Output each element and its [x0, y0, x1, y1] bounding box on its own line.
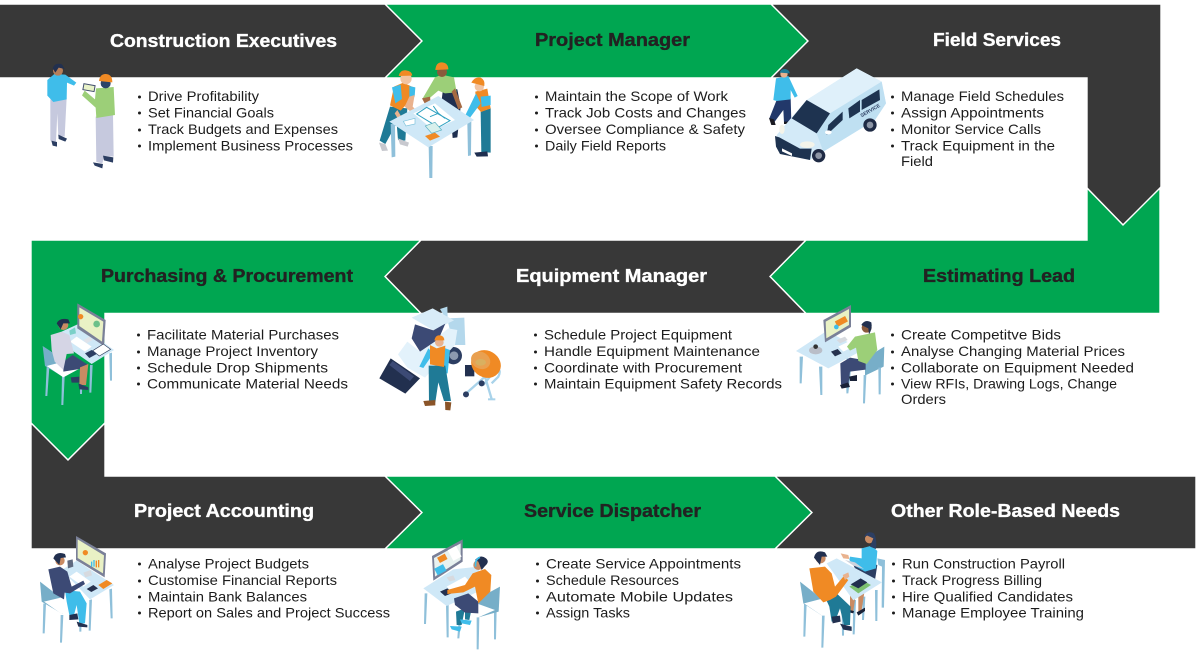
- icon: dispatcher with headset at desk: [423, 539, 500, 649]
- bullet list: Field Services: [891, 88, 1064, 169]
- bullet list: Equipment Manager: [534, 326, 782, 392]
- panel: Service Dispatcher: [385, 476, 812, 649]
- icon: buyer at desk: [43, 303, 114, 405]
- panel: Purchasing & Procurement: [31, 240, 421, 460]
- bullet list: Construction Executives: [138, 88, 353, 154]
- bullet list: Service Dispatcher: Assign Tasks: [546, 604, 630, 620]
- panel: Field Services: [769, 4, 1161, 225]
- icon: two executives with tablet: [47, 64, 115, 168]
- ribbon: Purchasing & Procurement, turning downward: [31, 240, 421, 460]
- bullet list: Other Role-Based Needs: Track Progress Billing: [902, 572, 1042, 588]
- bullet list: Service Dispatcher: [536, 556, 741, 620]
- bullet list: Other Role-Based Needs: Run Construction Payroll: [902, 556, 1065, 572]
- ribbon: Equipment Manager, pointing left: [385, 240, 806, 314]
- bullet list: Construction Executives: Set Financial Goals: [148, 104, 274, 120]
- heading: Purchasing & Procurement: Purchasing & Procurement: [101, 266, 353, 286]
- bullet list: Service Dispatcher: Create Service Appointments: [546, 556, 741, 572]
- bullet list: Project Accounting: Customise Financial Reports: [148, 572, 337, 588]
- bullet list: Field Services: Monitor Service Calls: [901, 121, 1041, 137]
- bullet list: Estimating Lead: Collaborate on Equipment Needed: [901, 360, 1134, 376]
- bullet list: Service Dispatcher: Schedule Resources: [546, 572, 679, 588]
- ribbon: Project Manager: [385, 4, 808, 78]
- bullet list: Estimating Lead: View RFIs, Drawing Logs, Change: [901, 376, 1117, 392]
- bullet list: Other Role-Based Needs: Hire Qualified Candidates: [902, 588, 1073, 604]
- ribbon: Field Services, turning downward: [771, 4, 1161, 225]
- bullet list: Construction Executives: Implement Business Processes: [148, 138, 353, 154]
- bullet list: Construction Executives: Track Budgets and Expenses: [148, 121, 338, 137]
- heading: Project Manager: Project Manager: [535, 30, 690, 50]
- bullet list: Project Manager: Daily Field Reports: [545, 138, 666, 154]
- panel: Other Role-Based Needs: [775, 476, 1196, 648]
- bullet list: Project Accounting: [138, 556, 390, 620]
- icon: three workers around plan table: [379, 62, 491, 178]
- bullet list: Project Accounting: Analyse Project Budgets: [148, 556, 309, 572]
- bullet list: Purchasing & Procurement: [137, 326, 348, 392]
- panel: Construction Executives: [0, 4, 422, 168]
- bullet list: Estimating Lead: Analyse Changing Material Prices: [901, 343, 1125, 359]
- bullet list: Project Accounting: Report on Sales and Project Success: [148, 604, 390, 620]
- heading: Project Accounting: Project Accounting: [134, 501, 314, 521]
- ribbon: Other Role-Based Needs: [775, 476, 1196, 549]
- heading: Other Role-Based Needs: Other Role-Based Needs: [891, 501, 1120, 521]
- bullet list: Estimating Lead: Create Competitve Bids: [901, 326, 1061, 342]
- bullet list: Project Manager: [535, 88, 746, 154]
- icon: skid loader, cement mixer and worker: [379, 307, 506, 410]
- bullet list: Field Services: Track Equipment in the: [901, 138, 1055, 154]
- bullet list: Field Services: Field: [901, 153, 933, 169]
- icon: two people meeting at table: [800, 532, 885, 648]
- ribbon: Construction Executives: [0, 4, 422, 78]
- bullet list: Purchasing & Procurement: Communicate Material Needs: [147, 376, 348, 392]
- bullet list: Construction Executives: Drive Profitability: [148, 88, 259, 104]
- ribbon: Project Accounting: [31, 423, 422, 549]
- ribbon: Service Dispatcher: [385, 476, 812, 549]
- icon: estimator at desk: [796, 305, 884, 403]
- bullet list: Equipment Manager: Schedule Project Equipment: [544, 326, 732, 342]
- heading: Field Services: Field Services: [933, 30, 1061, 50]
- bullet list: Other Role-Based Needs: [892, 556, 1084, 620]
- bullet list: Other Role-Based Needs: Manage Employee Training: [902, 604, 1084, 620]
- heading: Equipment Manager: Equipment Manager: [516, 266, 707, 286]
- heading: Service Dispatcher: Service Dispatcher: [524, 501, 701, 521]
- heading: Estimating Lead: Estimating Lead: [923, 266, 1075, 286]
- bullet list: Equipment Manager: Coordinate with Procurement: [544, 360, 742, 376]
- panel: Project Accounting: [31, 423, 422, 643]
- bullet list: Field Services: Assign Appointments: [901, 104, 1044, 120]
- bullet list: Estimating Lead: Orders: [901, 391, 946, 407]
- bullet list: Estimating Lead: [891, 326, 1134, 407]
- bullet list: Field Services: Manage Field Schedules: [901, 88, 1064, 104]
- heading: Construction Executives: Construction Executives: [110, 31, 337, 51]
- icon: service van and technician: [769, 68, 886, 162]
- panel: Estimating Lead: [770, 188, 1160, 407]
- panel: Equipment Manager: [385, 240, 806, 314]
- bullet list: Equipment Manager: Maintain Equipment Safety Records: [544, 376, 782, 392]
- panel: Project Manager: [379, 4, 808, 178]
- ribbon: Estimating Lead, pointing left: [770, 188, 1160, 314]
- bullet list: Project Manager: Oversee Compliance & Safety: [545, 121, 745, 137]
- bullet list: Project Manager: Maintain the Scope of Work: [545, 88, 729, 104]
- bullet list: Purchasing & Procurement: Manage Project Inventory: [147, 343, 318, 359]
- bullet list: Purchasing & Procurement: Schedule Drop Shipments: [147, 360, 328, 376]
- icon: service van and technician: SERVICE: [860, 103, 882, 119]
- bullet list: Purchasing & Procurement: Facilitate Material Purchases: [147, 326, 339, 342]
- icon: accountant at desk: [40, 536, 114, 643]
- bullet list: Equipment Manager: Handle Equipment Maintenance: [544, 343, 760, 359]
- bullet list: Project Manager: Track Job Costs and Changes: [545, 104, 746, 120]
- bullet list: Project Accounting: Maintain Bank Balances: [148, 588, 307, 604]
- bullet list: Service Dispatcher: Automate Mobile Updates: [546, 588, 733, 604]
- equipment details: skid loader, mixer and list: [379, 307, 782, 410]
